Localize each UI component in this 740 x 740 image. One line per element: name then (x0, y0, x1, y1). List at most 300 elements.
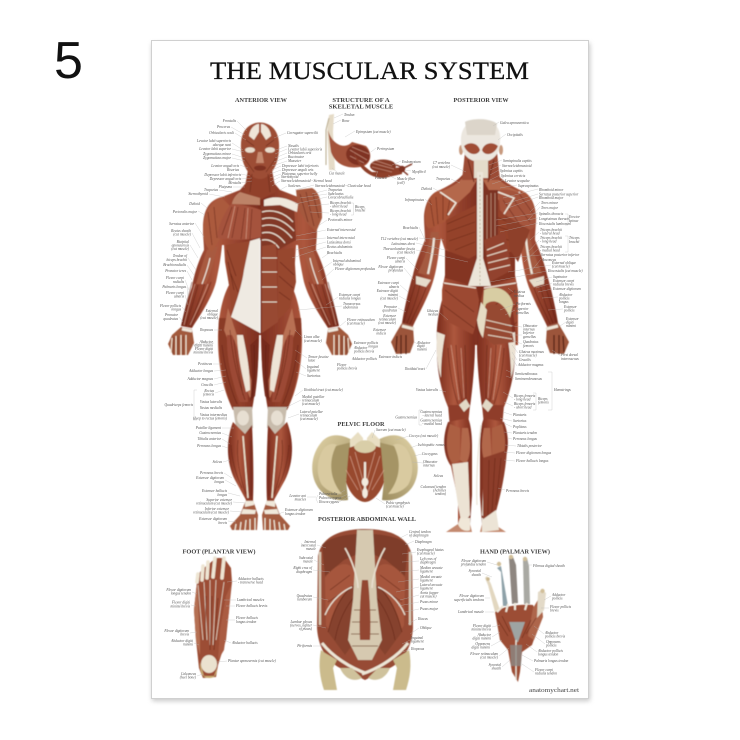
labels: anterior view: Internal intercostal (326, 236, 355, 240)
labels: posterior view: ulnaris (395, 260, 406, 264)
head with galea and occipitalis (459, 119, 503, 182)
labels: anterior view: (cut muscle) (300, 417, 318, 421)
labels: posterior view: minimi (566, 324, 576, 328)
labels: anterior view: Levator labii superior (198, 147, 232, 151)
labels: posterior view: Adductor magnus (517, 363, 544, 367)
labels: anterior view: Scalenes (288, 184, 301, 188)
labels: posterior abdominal wall: (cut muscle) (417, 552, 435, 556)
labels: posterior view: retinaculum (379, 318, 396, 322)
labels: hand: superficialis tendons (454, 598, 485, 602)
labels: anterior view: retinaculum (300, 414, 318, 418)
heading: foot: FOOT (PLANTAR VIEW) (182, 548, 256, 556)
website credit: anatomychart.net (529, 687, 579, 694)
labels: posterior view: Erector (569, 215, 580, 219)
labels: pelvic floor: Coccygeus (422, 452, 438, 456)
labels: foot: Flexor digitorum (166, 588, 191, 592)
labels: anterior view: Coracobrachialis (328, 196, 354, 200)
labels: anterior view: longus (217, 493, 228, 497)
labels: anterior view: Biceps brachii (330, 201, 351, 205)
labels: posterior abdominal wall: Lateral arcuate (420, 583, 442, 587)
labels: posterior view: (cut muscle) (380, 297, 399, 301)
labels: anterior view: Sternocleidomastoid - Clavicular head (315, 184, 371, 188)
labels: posterior view: Vastus lateralis (416, 388, 439, 392)
labels: posterior view: pollicis (558, 297, 570, 301)
labels: anterior view: Brachialis (327, 251, 343, 255)
labels: posterior view: Extensor carpi (378, 281, 399, 285)
labels: anterior view: (cut muscle) (171, 247, 190, 251)
labels: hand: Abductor (545, 631, 558, 635)
labels: hand: Flexor retinaculum (470, 652, 498, 656)
labels: pelvic floor (288, 428, 445, 509)
labels: posterior view: Pronator (384, 305, 397, 309)
labels: anterior view: ligament (307, 369, 321, 373)
labels: posterior view: Gluteus maximus (519, 350, 544, 354)
labels: posterior view: Levator scapulae (504, 179, 530, 183)
labels: anterior view: pollicis brevis (336, 367, 358, 371)
labels: anterior view: longus tendon (285, 512, 305, 516)
labels: posterior abdominal wall: Iliopsoas (410, 647, 425, 651)
labels: anterior view: Sternocleidomastoid - Sternal head (281, 179, 332, 183)
labels: skeletal muscle structure: (cell) (397, 181, 405, 185)
labels: anterior view: quadratus (163, 317, 179, 321)
labels: posterior view: Gastrocnemius (420, 410, 442, 414)
labels: hand: radialis tendon (535, 672, 557, 676)
labels: anterior view: abdominis (343, 306, 359, 310)
labels: posterior abdominal wall: intercostal (301, 544, 316, 548)
labels: posterior view: Biceps (538, 397, 548, 401)
labels: anterior view: Depressor labii inferioris (203, 173, 242, 177)
labels: hand: Opponens (475, 642, 490, 646)
labels: anterior view: Flexor digitorum profundus (334, 267, 376, 271)
labels: anterior view: Adductor pollicis (351, 357, 377, 361)
labels: posterior view: Semitendinosus (515, 372, 538, 376)
labels: anterior view: Bicipital (177, 240, 189, 244)
labels: posterior view: - lateral head (540, 232, 560, 236)
labels: anterior view: Inferior extensor (205, 507, 229, 511)
labels: posterior view: Extensor carpi (553, 279, 574, 283)
labels: posterior view: digiti (566, 321, 574, 325)
labels: posterior view: Plantaris tendon (512, 431, 537, 435)
labels: anterior view: Masseter (287, 159, 302, 163)
labels: anterior view: Gastrocnemius (199, 431, 222, 435)
diagram: pelvic floor (312, 432, 418, 502)
labels: posterior view: Splenius capitis (500, 169, 523, 173)
labels: posterior view: - lateral head (422, 413, 442, 417)
labels: posterior view: Flexor digitorum (378, 265, 403, 269)
labels: posterior view: Extensor digiti (377, 289, 398, 293)
labels: skeletal muscle structure (329, 113, 426, 185)
labels: anterior view: Tensor fasciae (308, 355, 329, 359)
labels: posterior view: Semispinalis capitis (503, 159, 532, 163)
labels: posterior view: medius (514, 294, 525, 298)
labels: posterior view: - long head (514, 397, 531, 401)
labels: anterior view: Levator anguli oris (210, 164, 240, 168)
labels: posterior view: Extensor (566, 317, 579, 321)
labels: posterior view: Trapezius (436, 177, 451, 181)
labels: posterior abdominal wall: of diaphragm (409, 534, 429, 538)
labels: posterior view: Triceps (569, 236, 580, 240)
title: THE MUSCULAR SYSTEM (210, 56, 529, 85)
labels: posterior abdominal wall: muscle (303, 560, 313, 564)
labels: posterior view: Triceps brachii (540, 245, 562, 249)
labels: posterior view: (cut muscle) (397, 251, 416, 255)
labels: posterior view: (cut muscle) (432, 165, 451, 169)
labels: posterior view: Thoracolumbar fascia (383, 247, 415, 251)
labels: posterior view: External oblique (552, 261, 576, 265)
labels: posterior abdominal wall: Internal (304, 540, 316, 544)
labels: pelvic floor: Puborectalis (318, 492, 338, 496)
labels: posterior abdominal wall: Oblique (420, 626, 432, 630)
pectoralis and deltoid, viewer left (203, 192, 261, 252)
labels: posterior abdominal wall: Lumbar plexus (291, 620, 312, 624)
labels: anterior view: pollicis brevis (353, 350, 375, 354)
labels: anterior view: Extensor carpi (339, 293, 360, 297)
labels: hand: (cut muscle) (480, 656, 499, 660)
labels: anterior view: External (206, 309, 218, 313)
labels: posterior view: Occipitalis (507, 133, 523, 137)
labels: foot: minimi brevis (170, 604, 191, 608)
labels: hand: sheath (472, 573, 481, 577)
labels: posterior view: Longissimus thoracis (538, 217, 570, 221)
labels: posterior view: longus (559, 300, 569, 304)
labels: anterior view: brachii (355, 209, 365, 213)
labels: posterior view: Flexor hallucis longus (515, 459, 549, 463)
labels: posterior view: Plantaris (512, 413, 527, 417)
labels: anterior view: Flexor retinaculum (347, 318, 375, 322)
labels: anterior view: Pronator (165, 313, 178, 317)
labels: skeletal muscle structure: Endomysium (401, 160, 421, 164)
labels: posterior view: quadratus (382, 309, 398, 313)
labels: posterior view: radialis brevis (553, 283, 574, 287)
labels: posterior view: Deltoid (420, 187, 432, 191)
labels: anterior view: Iliopsoas (199, 328, 214, 332)
labels: posterior view: indicis (376, 332, 387, 336)
labels: posterior view: Biceps femoris (514, 394, 535, 398)
labels: anterior view: radialis (173, 280, 185, 284)
labels: anterior view: Vastus lateralis (200, 400, 223, 404)
labels: posterior view: minimi (417, 347, 427, 351)
labels: anterior view: Flexor digiti (195, 347, 213, 351)
labels: anterior view: Adductor longus (188, 369, 214, 373)
labels: posterior view: longus (368, 345, 379, 349)
labels: posterior abdominal wall: Median arcuate (420, 566, 443, 570)
labels: hand: Flexor carpi (535, 668, 553, 672)
labels: posterior abdominal wall: Medial arcuate (420, 575, 442, 579)
labels: hand: Flexor digitorum (461, 559, 486, 563)
labels: foot: longus tendon (236, 620, 256, 624)
labels: posterior view: Abductor (417, 341, 430, 345)
labels: anterior view: Extensor digitorum (285, 508, 313, 512)
labels: hand: Palmaris longus tendon (533, 659, 569, 663)
labels: skeletal muscle structure: Muscle fiber (397, 177, 415, 181)
labels: posterior view: First dorsal (561, 353, 578, 357)
labels: posterior view (353, 121, 583, 496)
labels: pelvic floor: Sacrum (cut muscle) (376, 428, 406, 432)
labels: pelvic floor: (cut muscle) (386, 505, 404, 509)
labels: anterior view: Pectoralis major (172, 210, 198, 214)
labels: foot: - transverse head (238, 581, 263, 585)
labels: anterior view: Sternothyroid (188, 192, 208, 196)
labels: posterior abdominal wall: Esophageal hiatus (417, 548, 444, 552)
labels: anterior view: Patellar ligament (195, 426, 222, 430)
labels: anterior view: Extensor digitorum (196, 476, 224, 480)
labels: posterior view: Hamstrings (553, 388, 571, 392)
labels: hand: longus tendon (538, 653, 558, 657)
labels: posterior view: pollicis (563, 309, 575, 313)
labels: posterior view: (cut muscle) (519, 354, 537, 358)
labels: pelvic floor: Iliococcygeus (318, 500, 339, 504)
labels: posterior view: Gastrocnemius (420, 418, 442, 422)
labels: anterior view: radialis longus (339, 297, 361, 301)
labels: pelvic floor: Pubococcygeus (318, 496, 342, 500)
labels: posterior view: brachii (569, 240, 579, 244)
labels: skeletal muscle structure: Fascicle (374, 176, 388, 180)
labels: hand: Flexor pollicis (550, 605, 571, 609)
labels: hand: sheath (492, 667, 501, 671)
labels: anterior view: Corrugator supercilii (287, 131, 318, 135)
labels: skeletal muscle structure: Tendon (344, 113, 355, 117)
labels: posterior view: medius (428, 313, 439, 317)
labels: anterior view: (cut muscle) (302, 402, 320, 406)
labels: posterior view: gemellus (523, 335, 536, 339)
labels: pelvic floor: Pubic symphysis (386, 501, 410, 505)
labels: hand: Flexor digiti (473, 624, 491, 628)
labels: anterior view: retinaculum (cut muscle) (193, 511, 230, 515)
labels: posterior abdominal wall: Psoas minor (419, 600, 439, 604)
labels: anterior view (159, 119, 377, 525)
diagram: skeletal muscle structure (326, 114, 412, 178)
labels: posterior view: interosseous (561, 357, 579, 361)
ribs and deep muscles, viewer right (261, 188, 322, 250)
labels: hand: Lumbrical muscle (457, 610, 484, 614)
labels: anterior view: digiti minimi (195, 344, 213, 348)
labels: anterior view: Medial patellar (302, 395, 324, 399)
labels: anterior view: Serratus anterior (169, 222, 195, 226)
labels: posterior view: Flexor digitorum longus (515, 451, 552, 455)
labels: posterior view: Extensor indicis (378, 355, 403, 359)
labels: anterior view: Flexor carpi (166, 291, 184, 295)
labels: foot: longus tendon (171, 592, 191, 596)
labels: posterior view: Gracilis (519, 358, 531, 362)
labels: foot (163, 577, 277, 680)
labels: pelvic floor: Coccyx (cut muscle) (409, 434, 439, 438)
labels: anterior view: Extensor digitorum (199, 517, 227, 521)
labels: hand: brevis (550, 609, 559, 613)
labels: hand (454, 559, 572, 676)
labels: posterior view: Anconeus (541, 258, 557, 262)
labels: foot: Flexor hallucis brevis (235, 604, 268, 608)
labels: posterior view: Serratus posterior superior (539, 192, 579, 196)
labels: posterior abdominal wall: diaphragm (296, 570, 312, 574)
labels: posterior abdominal wall: Aorta (upper (420, 591, 439, 595)
figure: anterior muscular body (168, 122, 352, 530)
labels: posterior abdominal wall (290, 530, 444, 652)
labels: posterior abdominal wall: Inguinal (411, 636, 423, 640)
labels: anterior view: (deep to rectus femoris) (193, 417, 228, 421)
labels: hand: Abductor (478, 633, 491, 637)
labels: anterior view: (cut muscle) (347, 322, 365, 326)
labels: anterior view: Inguinal (307, 365, 319, 369)
labels: posterior abdominal wall: ligament (420, 570, 434, 574)
labels: posterior view: Semimembranosus (515, 377, 543, 381)
labels: anterior view: Risorius (226, 168, 240, 172)
labels: hand: Adductor (552, 593, 565, 597)
labels: anterior view: (cut muscle) (200, 316, 219, 320)
labels: posterior view: Sternocleidomastoid (502, 164, 532, 168)
labels: posterior view: Gastrocnemius (395, 416, 418, 420)
labels: posterior view: Iliocostalis (cut muscle) (547, 269, 583, 273)
labels: anterior view: ulnaris (174, 295, 185, 299)
labels: posterior view: - medial head (422, 422, 442, 426)
heading: pelvic floor: PELVIC FLOOR (338, 421, 385, 428)
labels: posterior view: Popliteus (512, 425, 527, 429)
labels: skeletal muscle structure: Epimysium (cut muscle) (355, 130, 391, 134)
labels: anterior view: retinaculum (302, 399, 320, 403)
labels: skeletal muscle structure: Bone (342, 119, 350, 123)
labels: anterior view: Biceps (355, 205, 365, 209)
labels: posterior view: profundus (388, 269, 404, 273)
labels: hand: profundus tendon (460, 563, 486, 567)
labels: anterior view: aponeurosis (172, 244, 190, 248)
poster sheet (152, 40, 590, 701)
deep back muscles, viewer right (484, 189, 536, 282)
labels: posterior abdominal wall: cut muscle) (420, 595, 437, 599)
labels: posterior view: minimi (388, 293, 398, 297)
labels: skeletal muscle structure: Perimysium (376, 147, 395, 151)
labels: posterior abdominal wall: diaphragm (420, 561, 436, 565)
labels: posterior view: tendon) (435, 492, 447, 496)
labels: anterior view: Brachioradialis (163, 263, 187, 267)
labels: foot: (heel bone) (180, 676, 197, 680)
labels: anterior view: Internal abdominal (333, 259, 361, 263)
labels: posterior view: Infraspinatus (404, 198, 425, 202)
labels: posterior view: Triceps brachii (540, 236, 562, 240)
heading: posterior view: POSTERIOR VIEW (454, 97, 509, 104)
labels: anterior view: Procerus (216, 125, 231, 129)
labels: posterior view: Supinator (553, 275, 568, 279)
labels: posterior abdominal wall: Central tendon (409, 530, 431, 534)
labels: foot: minimi (183, 643, 193, 647)
labels: anterior view: Levator labii superioris (287, 148, 323, 152)
labels: anterior view: retinaculum (cut muscle) (196, 502, 233, 506)
labels: anterior view: Adductor magnus (187, 377, 214, 381)
labels: posterior view: spinae (569, 219, 579, 223)
labels: anterior view: Soleus (213, 460, 223, 464)
labels: posterior view: Triceps brachii (540, 228, 562, 232)
labels: anterior view: Gracilis (201, 383, 214, 387)
labels: posterior view: Sartorius (513, 419, 527, 423)
labels: posterior view: Rhomboid minor (538, 188, 564, 192)
labels: hand: minimi brevis (471, 628, 492, 632)
head and neck (241, 122, 279, 200)
deep calf and long tendons, viewer right (477, 425, 507, 532)
labels: posterior view: ulnaris (389, 285, 400, 289)
labels: anterior view: - long head (330, 213, 347, 217)
diagram: posterior abdominal wall (317, 529, 413, 690)
labels: hand: Abductor pollicis (538, 649, 563, 653)
labels: anterior view: - short head (330, 204, 348, 208)
labels: anterior view: Levator labii superioris (197, 139, 231, 143)
labels: posterior view: Soleus (434, 474, 444, 478)
labels: anterior view: Palmaris longus (161, 285, 187, 289)
labels: anterior view: Rectus sheath (171, 229, 191, 233)
labels: posterior view: C7 vertebra (433, 161, 450, 165)
labels: anterior view: Lateral patellar (300, 410, 323, 414)
labels: posterior abdominal wall: ligament (420, 579, 434, 583)
page number: 5 (54, 32, 83, 90)
labels: posterior view: Flexor carpi (387, 256, 405, 260)
labels: posterior view: Splenius cervicis (501, 174, 526, 178)
labels: posterior abdominal wall: ligament (411, 640, 425, 644)
labels: foot: Lumbrical muscles (236, 598, 265, 602)
labels: posterior abdominal wall: Diaphragm (414, 540, 432, 544)
labels: anterior view: Tendon of (173, 254, 187, 258)
heading: hand: HAND (PALMAR VIEW) (480, 548, 550, 556)
labels: anterior view: Buccinator (288, 155, 305, 159)
labels: anterior view: Transversus (343, 302, 360, 306)
labels: posterior view: femoris (523, 344, 534, 348)
diagram: palmar hand (485, 555, 546, 682)
labels: anterior view: Pectoralis minor (327, 218, 353, 222)
labels: anterior view: Abductor (354, 346, 367, 350)
labels: posterior view: Spinalis thoracis (539, 212, 564, 216)
labels: anterior view: oblique (207, 313, 218, 317)
labels: anterior view: Depressor labii inferioris (281, 164, 319, 168)
labels: anterior view: Platysma, superior belly (281, 172, 318, 177)
labels: hand: pollicis (545, 644, 557, 648)
labels: posterior view: digiti (417, 344, 425, 348)
diagram: plantar foot (194, 558, 232, 678)
labels: anterior view: Tibialis anterior (198, 437, 222, 441)
labels: hand: Fibrous digital sheath (532, 564, 565, 568)
labels: posterior view: Galea aponeurotica (500, 121, 529, 125)
labels: anterior view: Vastus medialis (200, 406, 223, 410)
labels: anterior view: Zygomaticus minor (203, 152, 232, 156)
labels: anterior view: biceps brachii (167, 258, 187, 262)
labels: pelvic floor: internus (423, 464, 435, 468)
labels: posterior view: - medial head (540, 249, 560, 253)
labels: posterior view: Quadratus (523, 340, 538, 344)
labels: posterior view: Tibialis posterior (517, 444, 542, 448)
labels: anterior view: Peroneus longus (196, 444, 222, 448)
labels: hand: Opponens (546, 640, 561, 644)
labels: anterior view: Superior extensor (206, 498, 232, 502)
labels: posterior view: - long head (540, 240, 557, 244)
labels: posterior view: Extensor (383, 314, 396, 318)
labels: skeletal muscle structure: Cut muscle (329, 172, 345, 176)
labels: anterior view: Mentalis (227, 181, 242, 185)
labels: posterior view: (cut muscle) (378, 321, 397, 325)
rectus abdominis, viewer right (260, 240, 296, 333)
labels: anterior view: Rectus (204, 389, 214, 393)
labels: anterior view: Quadriceps femoris (165, 403, 194, 407)
labels: posterior abdominal wall: Left crus of (420, 557, 436, 561)
labels: posterior view: Extensor (564, 305, 577, 309)
figure: posterior muscular body (391, 119, 569, 532)
labels: anterior view: Iliotibial tract (cut muscle) (303, 388, 344, 392)
labels: anterior view: longus (214, 480, 225, 484)
heading: structure of a skeletal muscle: SKELETAL MUSCLE (329, 103, 394, 110)
abdominal aponeurosis (226, 238, 260, 333)
labels: foot: Plantar aponeurosis (cut muscle) (227, 659, 277, 663)
labels: anterior view: Abductor (200, 340, 213, 344)
labels: posterior view: Peroneus longus (512, 437, 538, 441)
labels: anterior view: Biceps brachii (330, 209, 351, 213)
labels: anterior view: latae (308, 359, 316, 363)
labels: posterior view: - short head (514, 406, 532, 410)
labels: anterior view: Trapezius (204, 188, 219, 192)
labels: anterior view: Deltoid (188, 202, 200, 206)
